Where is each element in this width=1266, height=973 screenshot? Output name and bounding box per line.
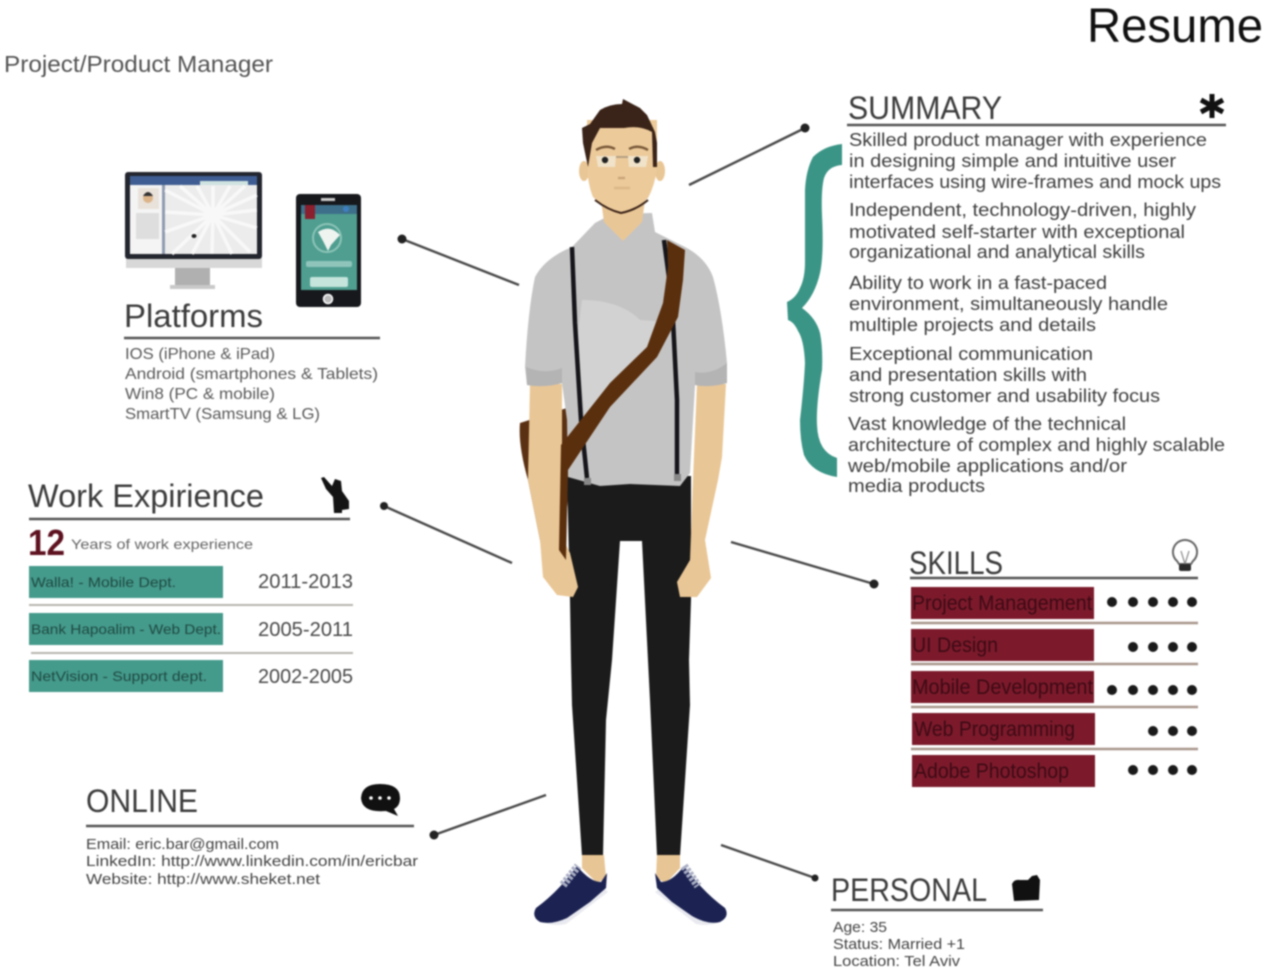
title: Resume bbox=[1087, 0, 1263, 53]
curly brace bbox=[787, 144, 842, 477]
left shoe bbox=[534, 866, 607, 923]
contact details bbox=[86, 837, 418, 888]
suspender clips bbox=[584, 474, 681, 485]
platforms list: Android (smartphones & Tablets) bbox=[125, 366, 378, 383]
personal details: Age: 35 bbox=[833, 920, 887, 936]
summary paragraph 5: media products bbox=[848, 476, 985, 496]
bag behind arm bbox=[520, 407, 570, 556]
heading: summary: SUMMARY bbox=[848, 90, 1002, 126]
skill: mobile development, 5 of 5: Mobile Development bbox=[912, 676, 1093, 699]
sleeve cuffs bbox=[526, 363, 727, 386]
summary paragraph 4 bbox=[849, 344, 1160, 406]
legs and trousers bbox=[567, 476, 691, 856]
heading: work experience: Work Expirience bbox=[28, 478, 264, 514]
skill: mobile development, 5 of 5 bbox=[911, 671, 1197, 703]
nose and mouth bbox=[618, 177, 625, 179]
personal details bbox=[833, 920, 965, 970]
summary paragraph 3: environment, simultaneously handle bbox=[849, 294, 1168, 314]
summary paragraph 2 bbox=[849, 200, 1196, 262]
summary paragraph 3 bbox=[849, 273, 1168, 335]
platforms list: Win8 (PC & mobile) bbox=[125, 386, 275, 403]
job: Walla: Walla! - Mobile Dept. bbox=[31, 574, 176, 590]
platforms list bbox=[125, 346, 378, 423]
shirt highlight bbox=[577, 300, 668, 420]
platforms list: IOS (iPhone & iPad) bbox=[125, 346, 275, 363]
right shoe sole bbox=[655, 888, 727, 925]
summary paragraph 1: Skilled product manager with experience bbox=[849, 130, 1207, 150]
years of experience: 12 bbox=[28, 522, 65, 563]
contact details: Email: eric.bar@gmail.com bbox=[86, 837, 279, 853]
skill: UI design, 4 of 5 bbox=[911, 629, 1197, 661]
messenger strap bbox=[559, 240, 685, 560]
platforms list: SmartTV (Samsung & LG) bbox=[125, 406, 320, 423]
hair bbox=[582, 99, 657, 167]
skill: web programming, 3 of 5: Web Programming bbox=[914, 718, 1075, 741]
connector lines bbox=[380, 124, 878, 882]
panel: summary bbox=[787, 90, 1226, 496]
skill: project management, 5 of 5 bbox=[911, 587, 1197, 619]
panel: personal bbox=[831, 872, 1043, 970]
summary paragraph 1: interfaces using wire-frames and mock ups bbox=[849, 172, 1221, 192]
summary paragraph 4: Exceptional communication bbox=[849, 344, 1093, 364]
icon: light bulb bbox=[1173, 540, 1197, 571]
summary paragraph 1: in designing simple and intuitive user bbox=[849, 151, 1176, 171]
left shoe sole bbox=[535, 888, 608, 925]
summary paragraph 4: strong customer and usability focus bbox=[849, 386, 1160, 406]
panel: online bbox=[86, 783, 418, 888]
job: Bank Hapoalim bbox=[29, 613, 353, 645]
icon: person with briefcase bbox=[321, 477, 349, 513]
summary paragraph 2: motivated self-starter with exceptional bbox=[849, 222, 1185, 242]
skill: adobe photoshop, 4 of 5 bbox=[912, 755, 1197, 787]
ankles bbox=[582, 855, 680, 883]
skill: adobe photoshop, 4 of 5: Adobe Photoshop bbox=[914, 760, 1069, 783]
summary paragraph 1 bbox=[849, 130, 1221, 192]
skill: project management, 5 of 5: Project Management bbox=[912, 592, 1092, 615]
heading: skills: SKILLS bbox=[909, 545, 1003, 581]
job: NetVision bbox=[29, 660, 353, 692]
shirt bbox=[525, 213, 727, 486]
job: Walla: 2011-2013 bbox=[258, 571, 353, 593]
subtitle: job role: Project/Product Manager bbox=[4, 51, 273, 77]
summary paragraph 5: web/mobile applications and/or bbox=[847, 456, 1127, 476]
illustration: standing man bbox=[520, 99, 727, 925]
panel: work experience bbox=[28, 477, 353, 692]
summary paragraph 3: multiple projects and details bbox=[849, 315, 1096, 335]
summary paragraph 2: Independent, technology-driven, highly bbox=[849, 200, 1196, 220]
job: Bank Hapoalim: Bank Hapoalim - Web Dept. bbox=[31, 621, 221, 637]
summary paragraph 4: and presentation skills with bbox=[849, 365, 1087, 385]
heading: platforms: Platforms bbox=[124, 298, 263, 334]
panel: skills bbox=[909, 540, 1198, 787]
eyes and glasses bbox=[596, 147, 648, 167]
heading: personal: PERSONAL bbox=[831, 872, 987, 908]
summary paragraph 5 bbox=[847, 414, 1225, 496]
years of experience bbox=[28, 522, 253, 563]
job: Bank Hapoalim: 2005-2011 bbox=[258, 619, 353, 641]
heading: online: ONLINE bbox=[86, 783, 198, 819]
summary paragraph 2: organizational and analytical skills bbox=[849, 242, 1145, 262]
right arm and hand bbox=[677, 384, 726, 597]
skill: UI design, 4 of 5: UI Design bbox=[912, 634, 998, 657]
shoe laces bbox=[563, 866, 578, 885]
job: Walla bbox=[29, 566, 353, 598]
contact details: LinkedIn: http://www.linkedin.com/in/ericbar bbox=[86, 854, 418, 870]
face bbox=[587, 120, 657, 212]
years of experience: Years of work experience bbox=[71, 536, 253, 552]
left arm and hand bbox=[528, 384, 578, 597]
panel: platforms bbox=[124, 172, 380, 423]
skill: web programming, 3 of 5 bbox=[912, 713, 1197, 745]
job: NetVision: 2002-2005 bbox=[258, 666, 353, 688]
personal details: Status: Married +1 bbox=[833, 937, 965, 953]
summary paragraph 5: Vast knowledge of the technical bbox=[848, 414, 1126, 434]
personal details: Location: Tel Aviv bbox=[833, 954, 961, 970]
neck bbox=[601, 200, 645, 241]
icon: chat bubble bbox=[361, 784, 400, 816]
icon: desktop monitor bbox=[125, 172, 262, 289]
right shoe bbox=[655, 866, 727, 923]
summary paragraph 3: Ability to work in a fast-paced bbox=[849, 273, 1107, 293]
icon: asterisk bbox=[1201, 94, 1223, 118]
icon: smartphone bbox=[296, 194, 361, 307]
icon: folder bbox=[1012, 875, 1040, 901]
contact details: Website: http://www.sheket.net bbox=[86, 872, 320, 888]
job: NetVision: NetVision - Support dept. bbox=[31, 668, 207, 684]
suspenders bbox=[572, 247, 587, 478]
summary paragraph 5: architecture of complex and highly scalable bbox=[848, 435, 1225, 455]
jaw line bbox=[595, 200, 648, 213]
ears bbox=[579, 161, 589, 181]
